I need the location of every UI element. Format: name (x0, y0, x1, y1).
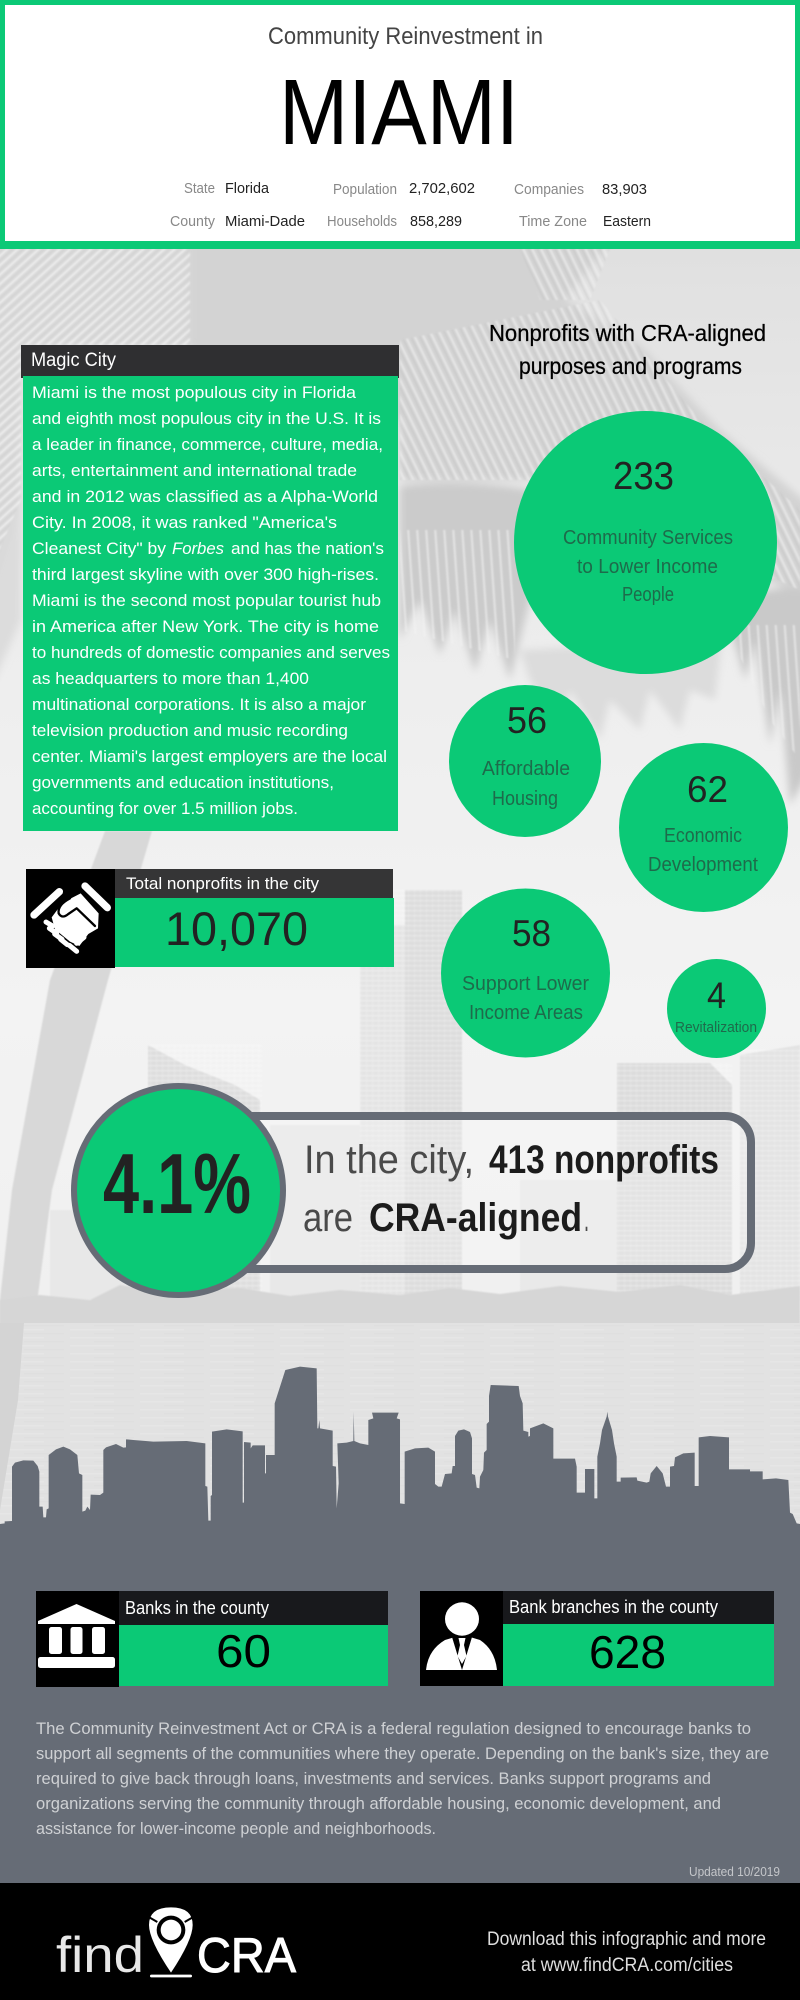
logo: findCRA (56, 1907, 296, 1983)
logo: findCRA: find (56, 1927, 144, 1983)
bubble: Economic Development 62: Development (648, 854, 758, 876)
download note (487, 1929, 766, 1976)
text block: about the CRA (36, 1719, 769, 1838)
body text: television production and music recording (32, 721, 348, 740)
body text: in America after New York. The city is home (32, 617, 379, 636)
city facts table: Households (327, 213, 397, 230)
callout text: In the city, (304, 1138, 474, 1182)
body text: Miami is the second most popular tourist hub (32, 591, 381, 610)
body text: governments and education institutions, (32, 773, 334, 792)
text block: about the CRA: required to give back through loans, investments and services. Banks support programs and (36, 1769, 711, 1788)
panel: Magic City (21, 345, 399, 831)
callout text: CRA-aligned (369, 1196, 582, 1240)
buildings (50, 890, 800, 1305)
panel heading: Magic City (31, 350, 116, 371)
heading: nonprofits with CRA-aligned purposes (489, 320, 766, 379)
city facts table: 83,903 (602, 181, 647, 198)
bubble: Community Services 233 (514, 411, 777, 674)
bubble: Affordable Housing 56 (449, 685, 601, 837)
city facts table: County (170, 213, 215, 230)
bubble: Economic Development 62: Economic (664, 825, 742, 847)
city facts table: Miami-Dade (225, 213, 305, 230)
body text: and has the nation's (231, 539, 384, 558)
callout text: are (303, 1196, 353, 1240)
icon: business person (426, 1602, 497, 1670)
palm trunk (0, 831, 152, 1525)
water (0, 1323, 800, 1543)
bubble: Economic Development 62 (619, 743, 788, 912)
callout text (303, 1138, 719, 1240)
lower grey panel (0, 1539, 800, 1883)
logo: findCRA: CRA (197, 1929, 296, 1983)
city facts table: 858,289 (410, 213, 462, 230)
callout text: . (584, 1196, 589, 1240)
heading: nonprofits with CRA-aligned purposes: Nonprofits with CRA-aligned (489, 320, 766, 346)
heading: nonprofits with CRA-aligned purposes: purposes and programs (519, 353, 742, 379)
text block: about the CRA: assistance for lower-income people and neighborhoods. (36, 1819, 436, 1838)
bubble: Revitalization 4: 4 (707, 975, 726, 1016)
city facts table (170, 180, 651, 230)
body text: a leader in finance, commerce, culture, media, (32, 435, 383, 454)
stat card: bank branches in the county: 628 (589, 1626, 666, 1678)
updated date: Updated 10/2019 (689, 1865, 780, 1879)
city facts table: Time Zone (519, 213, 587, 230)
panel: total nonprofits (26, 869, 394, 968)
bubble: Community Services 233: People (622, 584, 674, 606)
text block: about the CRA: organizations serving the community through affordable housing, economic development, and (36, 1794, 721, 1813)
bubble: Community Services 233: 233 (613, 455, 674, 498)
palm fronds (0, 240, 800, 805)
city facts table: Florida (225, 180, 270, 197)
value: 10,070 (165, 902, 308, 955)
body text: accounting for over 1.5 million jobs. (32, 799, 298, 818)
icon: bank building (38, 1604, 115, 1668)
stat card: banks in the county: 60 (216, 1625, 271, 1677)
city facts table: Eastern (603, 213, 651, 230)
body text: and in 2012 was classified as a Alpha-World (32, 487, 378, 506)
bubble: Revitalization 4 (667, 959, 766, 1058)
bubble: Support Lower Income Areas 58: 58 (512, 913, 551, 954)
bubble: Affordable Housing 56: Affordable (482, 758, 570, 780)
bubble: Economic Development 62: 62 (687, 769, 728, 810)
stat card: banks in the county (36, 1591, 388, 1687)
body text: as headquarters to more than 1,400 (32, 669, 309, 688)
callout text: 413 nonprofits (489, 1138, 719, 1182)
download note: at www.findCRA.com/cities (521, 1955, 733, 1976)
heading: Community Reinvestment in: Community Reinvestment in (268, 23, 543, 50)
footer (0, 1883, 800, 2000)
header panel (0, 2, 800, 249)
body text: and eighth most populous city in the U.S. It is (32, 409, 381, 428)
city facts table: Population (333, 181, 397, 198)
stat card: banks in the county: Banks in the county (125, 1598, 269, 1618)
body text: arts, entertainment and international trade (32, 461, 357, 480)
bubble: Community Services 233: to Lower Income (577, 556, 718, 578)
body text: to hundreds of domestic companies and serves (32, 643, 390, 662)
bubble: Revitalization 4: Revitalization (675, 1020, 757, 1036)
bubble: Support Lower Income Areas 58: Income Areas (469, 1002, 583, 1024)
panel heading (21, 345, 399, 378)
label: Total nonprofits in the city (126, 874, 319, 893)
percentage: 4.1% (103, 1137, 251, 1232)
text block: about the CRA: The Community Reinvestment Act or CRA is a federal regulation designed to encourage banks to (36, 1719, 751, 1738)
body text: Miami is the most populous city in Florida (32, 383, 357, 402)
callout: 4.1% CRA-aligned (74, 1086, 751, 1295)
body text: City. In 2008, it was ranked "America's (32, 513, 337, 532)
stat card: bank branches in the county (420, 1591, 774, 1686)
city facts table: State (184, 180, 215, 197)
body text: Forbes (172, 539, 224, 558)
text block: about the CRA: support all segments of the communities where they operate. Depending on the bank's size, they are (36, 1744, 769, 1763)
icon: map pin (149, 1907, 193, 1977)
bubble: Affordable Housing 56: Housing (492, 788, 558, 810)
body text: third largest skyline with over 300 high-rises. (32, 565, 379, 584)
bubble: Support Lower Income Areas 58 (441, 888, 610, 1058)
download note: Download this infographic and more (487, 1929, 766, 1950)
title: MIAMI: MIAMI (279, 60, 519, 164)
bubble: Community Services 233: Community Services (563, 527, 733, 549)
city facts table: Companies (514, 181, 584, 198)
background photo: palm and Miami skyline (0, 240, 800, 1549)
body text (32, 383, 390, 818)
tree line (0, 1285, 800, 1326)
body text: Cleanest City" by (32, 539, 167, 558)
icon: handshake (34, 886, 107, 951)
skyline silhouette (0, 1367, 800, 1540)
body text: center. Miami's largest employers are the local (32, 747, 387, 766)
city facts table: 2,702,602 (409, 180, 475, 197)
bubble: Affordable Housing 56: 56 (507, 700, 547, 741)
bubble: Support Lower Income Areas 58: Support Lower (462, 973, 589, 995)
body text: multinational corporations. It is also a major (32, 695, 366, 714)
stat card: bank branches in the county: Bank branches in the county (509, 1597, 718, 1617)
